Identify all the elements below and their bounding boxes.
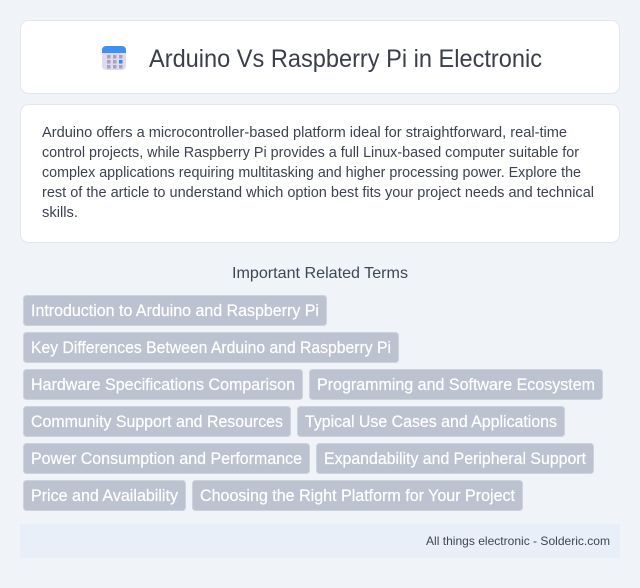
tag: community: [24, 406, 290, 436]
tag: choosing: [192, 480, 522, 510]
panel: intro text: skills.: [42, 205, 78, 221]
tag: power: [24, 444, 310, 474]
tag: choosing: Choosing the Right Platform for Your Project: [200, 487, 515, 505]
tag: key differences: Key Differences Between Arduino and Raspberry Pi: [31, 339, 391, 357]
tag: price: Price and Availability: [31, 487, 179, 505]
tag: community: Community Support and Resources: [31, 413, 283, 431]
heading: related terms: Important Related Terms: [232, 265, 408, 282]
panel: intro text: complex applications requiring multitasking and higher processing power. Explore the: [42, 165, 581, 181]
tag: introduction: Introduction to Arduino and Raspberry Pi: [31, 302, 319, 320]
tag: expandability: Expandability and Peripheral Support: [324, 450, 586, 468]
tag: introduction: [24, 296, 326, 326]
tag: expandability: [316, 444, 594, 474]
tag: key differences: [24, 332, 398, 362]
tag: use cases: [298, 406, 564, 436]
footer: All things electronic - Solderic.com: [426, 534, 610, 548]
panel: title card: [20, 20, 620, 94]
tag: power: Power Consumption and Performance: [31, 450, 302, 468]
panel: intro text: [20, 104, 620, 242]
tag: price: [24, 480, 186, 510]
tag: programming: Programming and Software Ecosystem: [317, 376, 595, 394]
tag: use cases: Typical Use Cases and Applications: [305, 413, 557, 431]
tag: programming: [310, 370, 602, 400]
icon: calendar grid: [102, 46, 126, 70]
panel: intro text: control projects, while Raspberry Pi provides a full Linux-based computer suitable for: [42, 145, 579, 161]
tag: hardware specifications: Hardware Specifications Comparison: [31, 376, 295, 394]
panel: intro text: Arduino offers a microcontroller-based platform ideal for straightforward, real-time: [42, 125, 567, 141]
panel: term tags: [24, 296, 602, 510]
title: Arduino Vs Raspberry Pi in Electronic: [149, 45, 542, 73]
footer: [20, 524, 620, 558]
tag: hardware specifications: [24, 370, 302, 400]
panel: intro text: rest of the article to understand which option best fits your project needs and technical: [42, 185, 594, 201]
